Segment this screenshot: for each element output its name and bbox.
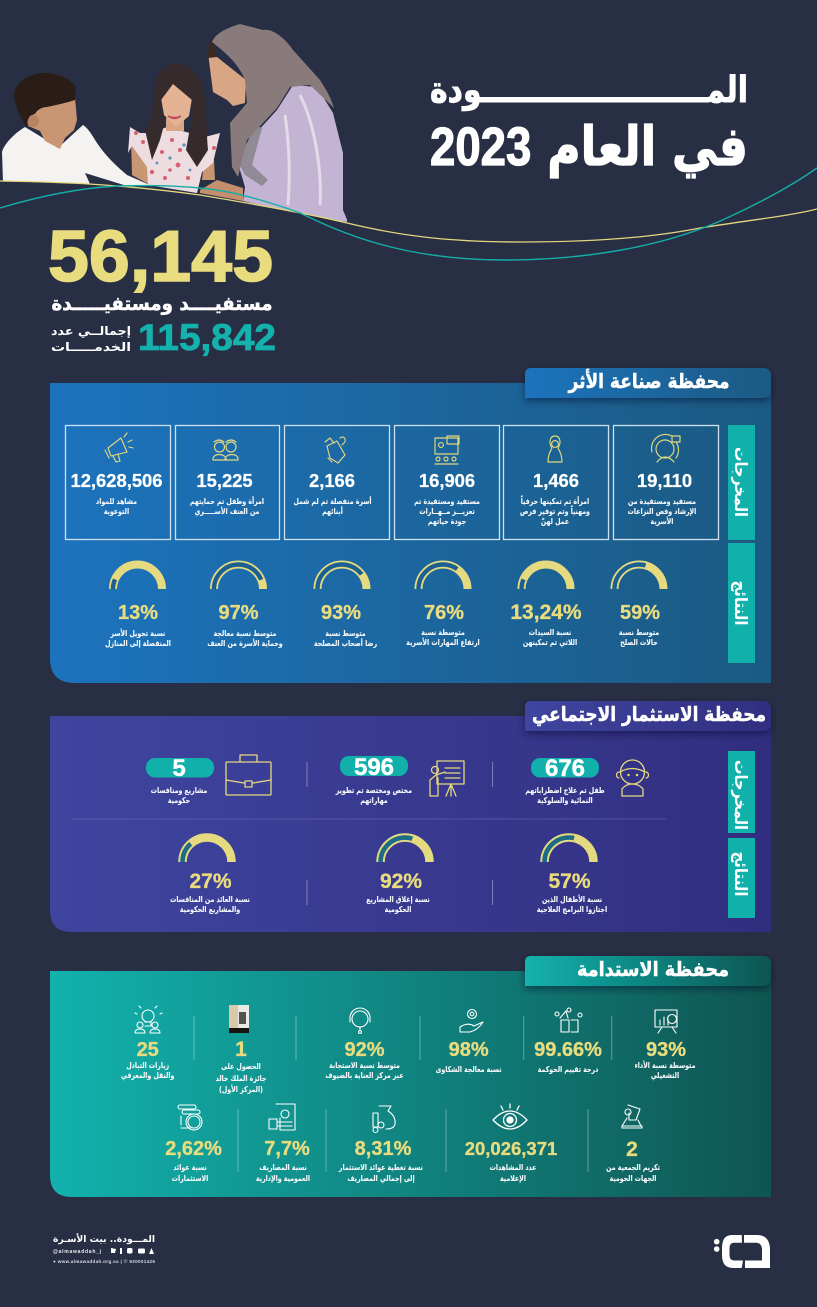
metric: 20,026,371: عدد المشاهدات bbox=[490, 1162, 537, 1172]
metric: 8,31%: إلى إجمالي المصاريف bbox=[347, 1173, 415, 1183]
icons: social media bbox=[111, 1248, 154, 1254]
title: في العام 2023 bbox=[430, 115, 748, 178]
gauge: 97%: 97% bbox=[218, 602, 259, 624]
metric: 93% bbox=[635, 1010, 695, 1080]
metric: 2: تكريم الجمعية من bbox=[606, 1162, 660, 1172]
metric: 25: والنقل والمعرفي bbox=[121, 1070, 174, 1080]
card: 15,225: امرأة وطفل تم حمايتهم bbox=[190, 496, 264, 506]
card: 1,466: عمل لهنّ bbox=[541, 516, 569, 526]
metric: 92%: 92% bbox=[344, 1039, 385, 1061]
output: 596 bbox=[335, 754, 464, 805]
metric: 2: الجهات الحومية bbox=[610, 1173, 656, 1183]
headline stat: services: الخدمـــــات bbox=[51, 340, 131, 354]
panel heading tab: محفظة الاستدامة bbox=[577, 957, 729, 981]
footer: contact details bbox=[53, 1233, 155, 1264]
gauge: 57%: 57% bbox=[548, 870, 591, 893]
card: 2,166: أسرة منفصلة تم لم شمل bbox=[293, 496, 372, 506]
gauge: 92%: 92% bbox=[380, 870, 422, 893]
metric: 98%: نسبة معالجة الشكاوى bbox=[436, 1064, 502, 1074]
output: 5 bbox=[146, 755, 271, 805]
side label: results: النتائج bbox=[730, 852, 750, 896]
gauge: 93% bbox=[314, 564, 377, 648]
gauge: 76%: متوسطة نسبة bbox=[421, 627, 465, 637]
output: 5: حكومية bbox=[168, 795, 190, 805]
logo bbox=[714, 1235, 770, 1268]
gauge: 92%: نسبة إغلاق المشاريع bbox=[366, 894, 430, 904]
metric: 20,026,371 bbox=[465, 1104, 557, 1183]
output: 596: 596 bbox=[354, 754, 394, 781]
card: 15,225: من العنف الأســـــري bbox=[195, 506, 259, 516]
side label: results bbox=[728, 543, 755, 663]
output: 5: 5 bbox=[172, 755, 186, 782]
metric: 7,7%: 7,7% bbox=[264, 1138, 310, 1160]
gauge: 97% bbox=[207, 564, 283, 648]
gauge: 97%: متوسط نسبة معالجة bbox=[214, 628, 276, 638]
metric: 98%: 98% bbox=[449, 1039, 489, 1061]
gauge: 13% bbox=[105, 564, 171, 648]
gauge: 13,24% bbox=[510, 564, 582, 647]
gauge: 13,24%: نسبة السيدات bbox=[529, 627, 572, 637]
metric: 20,026,371: 20,026,371 bbox=[465, 1138, 557, 1159]
metric: 99.66%: درجة تقييم الحوكمة bbox=[538, 1064, 599, 1074]
photo: family group bbox=[2, 24, 348, 222]
panel heading tab bbox=[525, 368, 771, 398]
output: 5: مشاريع ومنافسات bbox=[151, 785, 207, 795]
gauge: 57% bbox=[537, 838, 607, 914]
panel background bbox=[50, 716, 771, 932]
side label: outputs bbox=[728, 751, 755, 833]
gauge: 76% bbox=[406, 564, 480, 647]
girl bbox=[128, 63, 220, 193]
side label: results: النتائج bbox=[730, 580, 750, 626]
panel background bbox=[50, 383, 771, 683]
metric: 2,62%: نسبة عوائد bbox=[173, 1162, 207, 1172]
panel heading tab: محفظة الاستثمار الاجتماعي bbox=[532, 702, 766, 727]
side label: outputs: المخرجات bbox=[730, 760, 750, 830]
output: 676 bbox=[525, 755, 648, 805]
gauge: 93%: رضا أصحاب المصلحة bbox=[314, 638, 377, 648]
metric: award: جائزة الملك خالد bbox=[216, 1073, 266, 1083]
dividers bbox=[307, 762, 492, 905]
metric: 8,31%: 8,31% bbox=[355, 1138, 412, 1160]
card: 15,225: 15,225 bbox=[196, 470, 253, 491]
metric: 99.66%: 99.66% bbox=[534, 1039, 602, 1061]
metric: 93%: التشغيلي bbox=[651, 1070, 679, 1080]
footer: contact details: المـــودة.. بيت الأسـرة bbox=[53, 1233, 155, 1245]
metric: 25 bbox=[121, 1006, 174, 1080]
headline stat: services bbox=[51, 317, 276, 358]
gauge: 13%: نسبة تحويل الأسر bbox=[110, 628, 166, 638]
woman bbox=[200, 24, 348, 222]
metric: 99.66% bbox=[534, 1008, 602, 1074]
gauge: 27%: نسبة العائد من المنافسات bbox=[170, 894, 250, 904]
metric: 2 bbox=[606, 1105, 660, 1183]
metric: 93%: 93% bbox=[646, 1039, 686, 1061]
card: 12,628,506: 12,628,506 bbox=[70, 470, 163, 491]
card: 2,166: 2,166 bbox=[309, 470, 355, 491]
gauge: 93%: متوسط نسبة bbox=[325, 628, 366, 638]
gauge: 93%: 93% bbox=[321, 602, 361, 624]
footer: contact details: ● www.almawaddah.org.sa | ✆ 920001426 bbox=[53, 1259, 155, 1264]
panel: sustainability portfolio bbox=[50, 956, 771, 1197]
metric: 25: 25 bbox=[137, 1039, 159, 1061]
card: 2,166 bbox=[284, 426, 390, 540]
gauge: 13%: المنفصلة إلى المنازل bbox=[105, 638, 171, 648]
card: 12,628,506: التوعوية bbox=[104, 506, 129, 516]
card: 16,906: مستفيد ومستفيدة تم bbox=[414, 496, 480, 506]
gauge: 13,24%: 13,24% bbox=[510, 601, 582, 624]
gauge: 59% bbox=[614, 564, 664, 647]
metric: 2: 2 bbox=[626, 1138, 638, 1161]
icon: award book cover bbox=[229, 1005, 249, 1033]
card: 19,110: الأسرية bbox=[651, 516, 673, 526]
output: 676: طفل تم علاج اضطراباتهم bbox=[525, 785, 605, 795]
gauge: 27% bbox=[170, 838, 250, 914]
metric: 92%: عبر مركز العناية بالضيوف bbox=[325, 1070, 404, 1080]
gauge: 57%: نسبة الأطفال الذين bbox=[542, 894, 602, 904]
metric: award: (المركز الأول) bbox=[219, 1084, 263, 1094]
title bbox=[430, 70, 748, 178]
metric: 2,62% bbox=[165, 1105, 222, 1183]
output: 596: مهاراتهم bbox=[360, 795, 388, 805]
metric: 8,31%: نسبة تغطية عوائد الاستثمار bbox=[338, 1162, 423, 1172]
metric: 7,7%: العمومية والإدارية bbox=[256, 1173, 310, 1183]
metric: 2,62%: الاستثمارات bbox=[172, 1173, 208, 1183]
metric: 2,62%: 2,62% bbox=[165, 1138, 222, 1160]
footer: contact details: @almawaddah_j bbox=[53, 1249, 102, 1255]
gauge: 27%: 27% bbox=[189, 870, 232, 893]
headline stat: beneficiaries: مستفيــــد ومستفيـــــدة bbox=[52, 293, 272, 315]
metric: 92%: متوسط نسبة الاستجابة bbox=[329, 1060, 400, 1070]
output: 676: النمائية والسلوكية bbox=[537, 795, 593, 805]
dividers bbox=[194, 1016, 612, 1172]
metric: 25: زيارات التبادل bbox=[126, 1060, 169, 1070]
panel: impact portfolio bbox=[50, 368, 771, 683]
card: 16,906: تعزيـــز مــهــارات bbox=[419, 506, 475, 516]
output: 596: مختص ومختصة تم تطوير bbox=[335, 785, 412, 795]
metric: award bbox=[216, 1005, 266, 1094]
card: 16,906: 16,906 bbox=[419, 470, 475, 491]
metric: 7,7% bbox=[256, 1104, 310, 1183]
metric: 7,7%: نسبة المصاريف bbox=[259, 1162, 307, 1172]
gauge: 92% bbox=[366, 838, 430, 914]
metric: award: الحصول على bbox=[221, 1061, 261, 1071]
headline stat: services: 115,842 bbox=[138, 317, 276, 358]
metric: 8,31% bbox=[338, 1106, 423, 1183]
wave: gold line bbox=[0, 181, 817, 242]
panel background bbox=[50, 971, 771, 1197]
gauge: 59%: 59% bbox=[620, 602, 660, 624]
gauge: 13,24%: اللاتي تم تمكينهن bbox=[523, 637, 577, 647]
side label: outputs: المخرجات bbox=[730, 447, 750, 517]
title: المــــــــــــــــــــــودة bbox=[430, 70, 748, 111]
metric: 98% bbox=[436, 1010, 502, 1074]
card: 16,906 bbox=[394, 426, 500, 540]
output: 676: 676 bbox=[545, 755, 585, 782]
gauge: 76%: ارتفاع المهارات الأسرية bbox=[406, 637, 480, 647]
card: 16,906: جودة حياتهم bbox=[428, 516, 466, 526]
gauge: 92%: الحكومية bbox=[385, 904, 411, 914]
metric: 93%: متوسطة نسبة الأداء bbox=[635, 1060, 695, 1070]
gauge: 76%: 76% bbox=[424, 602, 464, 624]
side label: results bbox=[728, 838, 755, 918]
boy bbox=[2, 73, 152, 186]
card: 19,110: مستفيد ومستفيدة من bbox=[628, 496, 696, 506]
side label: outputs bbox=[728, 425, 755, 540]
gauge: 97%: وحماية الأسرة من العنف bbox=[207, 638, 283, 648]
card: 1,466: 1,466 bbox=[533, 470, 579, 491]
panel heading tab bbox=[525, 701, 771, 731]
gauge: 59%: متوسط نسبة bbox=[619, 627, 659, 637]
card: 19,110: 19,110 bbox=[637, 470, 692, 491]
card: 1,466: امرأة تم تمكينها حرفياً bbox=[520, 496, 589, 506]
card: 1,466: ومهنياً وتم توفير فرص bbox=[520, 506, 590, 516]
card: 19,110: الإرشاد وفض النزاعات bbox=[628, 506, 696, 516]
panel heading tab: محفظة صناعة الأثر bbox=[568, 368, 730, 393]
metric: 20,026,371: الإعلامية bbox=[500, 1173, 526, 1183]
gauge: 27%: والمشاريع الحكومية bbox=[180, 904, 240, 914]
card: 12,628,506: مشاهد للمواد bbox=[96, 496, 137, 506]
metric: award: 1 bbox=[235, 1038, 247, 1061]
headline stat: beneficiaries: 56,145 bbox=[48, 217, 273, 297]
gauge: 59%: حالات الصلح bbox=[620, 637, 658, 647]
card: 12,628,506 bbox=[66, 426, 170, 540]
gauge: 57%: اجتازوا البرامج العلاجية bbox=[537, 904, 607, 914]
gauge: 13%: 13% bbox=[118, 602, 158, 624]
metric: 92% bbox=[325, 1008, 404, 1080]
wave: teal line bbox=[0, 168, 817, 260]
headline stat: services: إجمالــي عدد bbox=[51, 324, 131, 338]
card: 15,225 bbox=[176, 426, 280, 540]
card: 19,110 bbox=[614, 426, 718, 540]
card: 2,166: أبنائهم bbox=[322, 506, 343, 516]
panel: social investment portfolio bbox=[50, 701, 771, 932]
card: 1,466 bbox=[504, 426, 608, 540]
panel heading tab bbox=[525, 956, 771, 986]
